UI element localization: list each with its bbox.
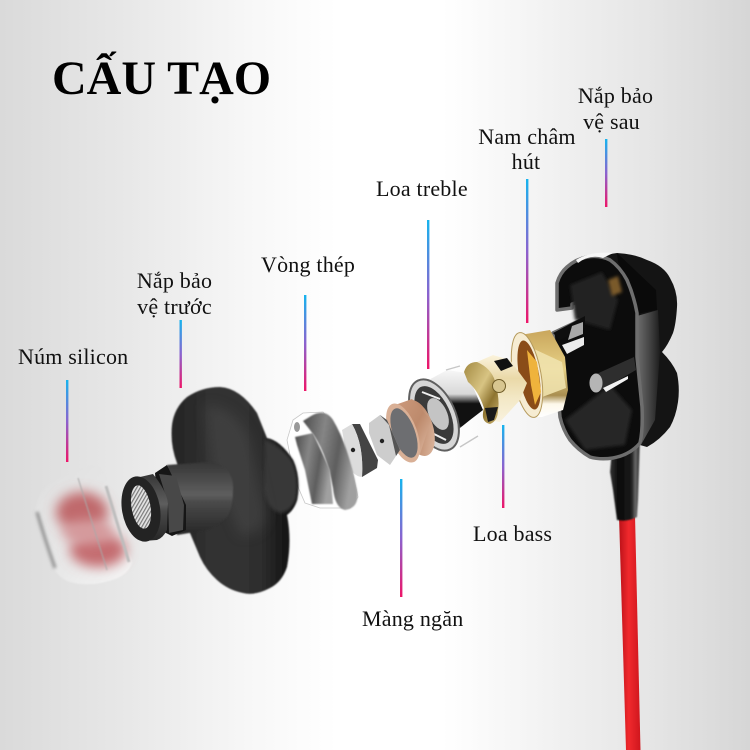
callout: Nắp bảo vệ trước — [137, 268, 212, 388]
prongs — [553, 316, 585, 340]
callout: Loa treble: Loa treble — [376, 176, 468, 201]
callout: Vòng thép: Vòng thép — [261, 252, 355, 277]
pin — [592, 357, 636, 392]
part: diaphragm copper ring — [379, 396, 441, 467]
callout: Nắp bảo vệ sau: vệ sau — [583, 109, 640, 134]
nozzle band — [140, 474, 168, 541]
cover back shell — [600, 253, 679, 447]
callout: Loa bass: Loa bass — [473, 521, 552, 546]
part: front cover flange — [117, 387, 298, 594]
callout: Nam châm hút: hút — [512, 149, 540, 174]
callout: Nắp bảo vệ trước: Nắp bảo — [137, 268, 212, 293]
cover highlight — [576, 253, 613, 263]
flange bulge — [264, 440, 297, 513]
cover glossy top facet — [617, 253, 657, 314]
callout: Núm silicon: Núm silicon — [18, 344, 128, 369]
part: magnet gold ring — [506, 330, 568, 420]
nozzle mesh — [117, 473, 165, 545]
part: steel ring plate — [287, 412, 358, 510]
cover cavity and rim — [553, 256, 642, 459]
part: rear cover — [553, 253, 679, 521]
callout: Núm silicon — [18, 344, 128, 462]
nozzle stem — [167, 462, 233, 535]
cable boot — [610, 436, 640, 521]
part: small grey disc — [369, 415, 400, 465]
treble front ring — [399, 372, 469, 458]
part: woofer gold cup — [464, 355, 527, 424]
callout: Nắp bảo vệ sau — [578, 83, 653, 207]
flange soft highlight — [205, 405, 265, 535]
callout: Nắp bảo vệ sau: Nắp bảo — [578, 83, 653, 108]
red cable — [619, 515, 640, 750]
part: treble speaker body — [399, 366, 483, 458]
title: CẤU TẠO — [52, 50, 271, 105]
callout: Nam châm hút — [478, 124, 576, 323]
callout: Nam châm hút: Nam châm — [478, 124, 576, 149]
callout: Nắp bảo vệ trước: vệ trước — [137, 294, 212, 319]
part: voice coil cylinder — [342, 424, 378, 477]
cover side facet — [637, 310, 660, 443]
nozzle collar — [155, 465, 186, 536]
callout: Loa bass — [473, 425, 552, 546]
part: silicone ear tip — [35, 465, 132, 584]
callout: Vòng thép — [261, 252, 355, 391]
callout: Màng ngăn: Màng ngăn — [362, 606, 463, 631]
